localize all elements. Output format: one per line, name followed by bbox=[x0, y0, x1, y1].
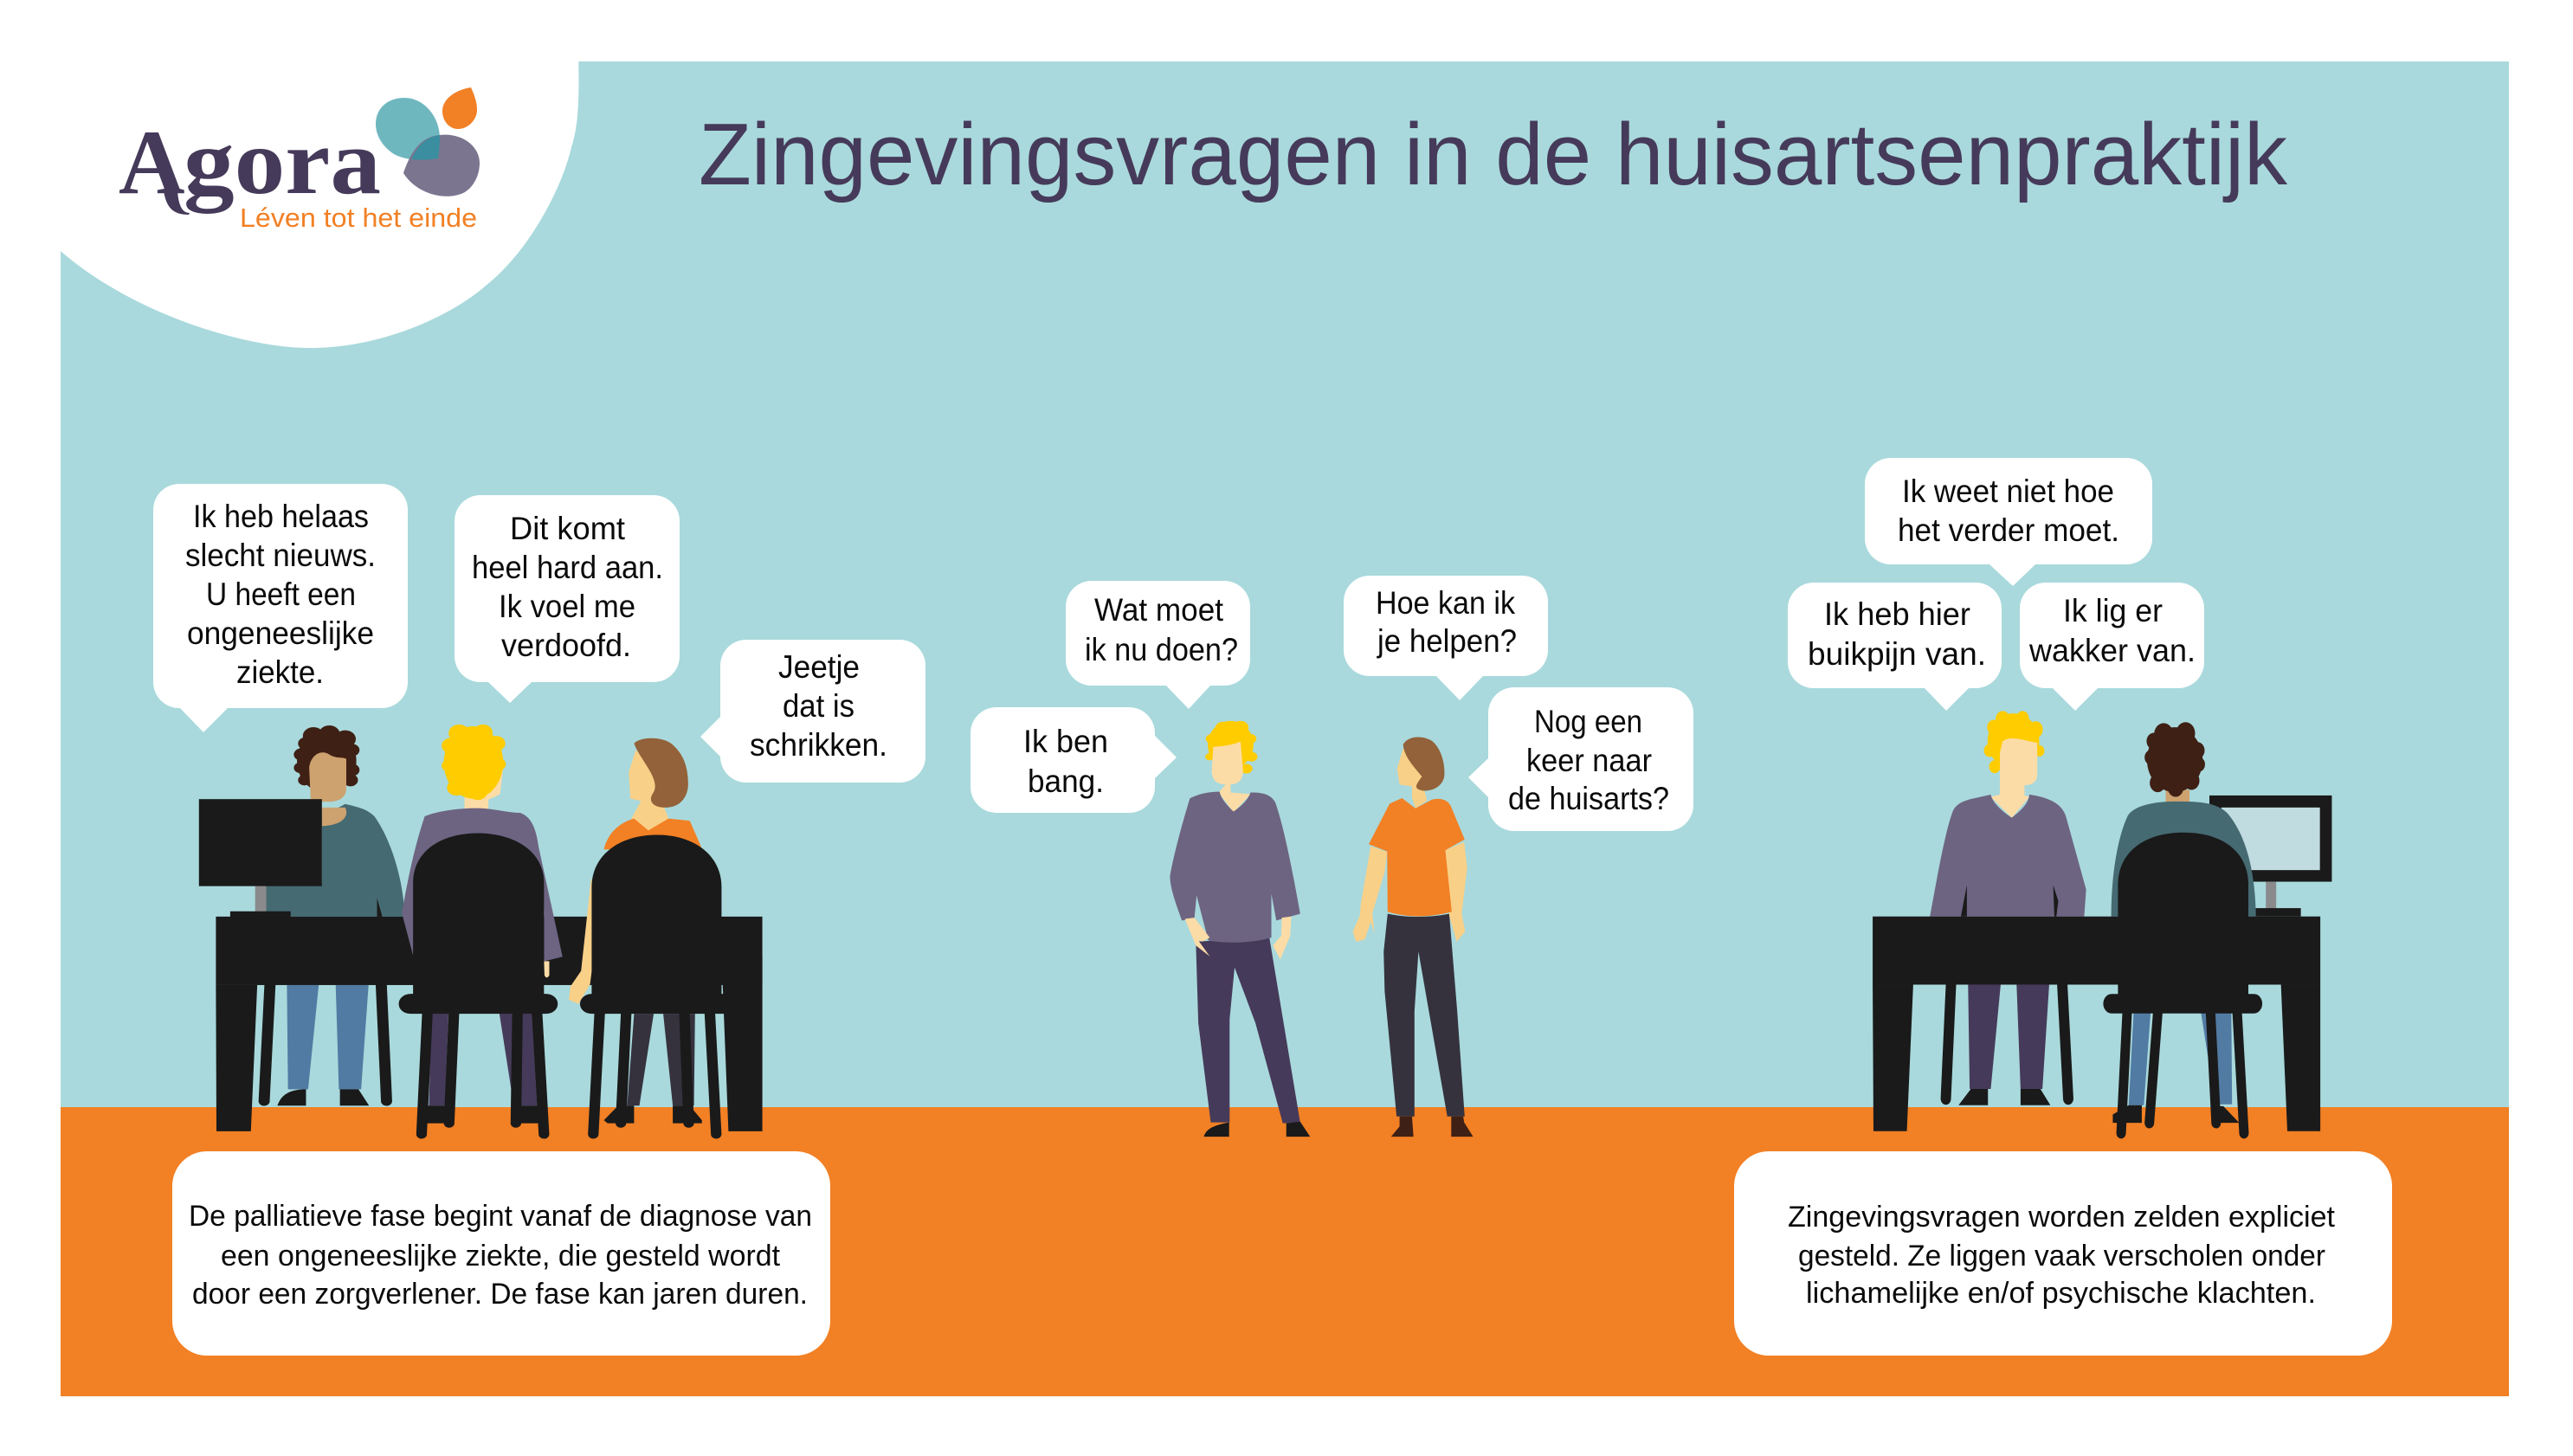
logo wordmark: A bbox=[119, 112, 185, 213]
patient man seated bbox=[402, 725, 563, 1105]
speech bubble: how can I help: Hoe kan ik bbox=[1376, 585, 1515, 621]
logo wordmark: gora bbox=[184, 111, 381, 214]
logo petal: purple bbox=[403, 135, 480, 196]
speech bubble: lying awake bbox=[2020, 583, 2204, 711]
speech bubble: patient numb: heel hard aan. bbox=[472, 550, 663, 585]
speech bubble: how can I help bbox=[1344, 576, 1548, 700]
chair bbox=[2103, 833, 2262, 1133]
speech bubble: patient numb: verdoofd. bbox=[501, 628, 631, 663]
title: Zingevingsvragen in de huisartsenpraktijk bbox=[699, 106, 2287, 203]
doctor seen from behind bbox=[2112, 722, 2256, 1123]
speech bubble: back to the GP: Nog een bbox=[1534, 704, 1642, 739]
desk bbox=[216, 917, 763, 1131]
speech bubble: partner shocked: dat is bbox=[783, 688, 854, 724]
speech bubble: partner shocked bbox=[700, 640, 925, 783]
callout: implicit questions: lichamelijke en/of psychische klachten. bbox=[1806, 1277, 2316, 1310]
woman standing bbox=[1353, 738, 1474, 1137]
callout: palliative phase bbox=[172, 1151, 830, 1356]
chairs bbox=[399, 833, 740, 1134]
speech bubble: doctor bad news: Ik heb helaas bbox=[193, 499, 369, 534]
speech bubble: doctor bad news: U heeft een bbox=[206, 577, 356, 612]
speech bubble: partner shocked: schrikken. bbox=[750, 727, 887, 763]
callout: palliative phase: een ongeneeslijke ziekte, die gesteld wordt bbox=[221, 1240, 781, 1272]
speech bubble: doctor bad news: slecht nieuws. bbox=[185, 538, 376, 573]
speech bubble: afraid: bang. bbox=[1028, 763, 1104, 799]
logo: Agora bbox=[119, 87, 480, 233]
patient man facing bbox=[1930, 711, 2086, 1105]
desk bbox=[1873, 917, 2320, 1131]
patient woman seated bbox=[569, 738, 702, 1124]
callout: implicit questions: Zingevingsvragen worden zelden expliciet bbox=[1788, 1201, 2336, 1234]
man standing bbox=[1170, 721, 1310, 1137]
speech bubble: patient numb bbox=[455, 495, 680, 703]
callout: palliative phase: door een zorgverlener. De fase kan jaren duren. bbox=[192, 1278, 808, 1311]
speech bubble: back to the GP bbox=[1468, 687, 1693, 831]
speech bubble: doctor bad news: ziekte. bbox=[236, 654, 324, 690]
callout: palliative phase: De palliatieve fase begint vanaf de diagnose van bbox=[189, 1200, 812, 1233]
logo petal overlap bbox=[411, 135, 440, 160]
computer monitor bbox=[199, 799, 322, 917]
speech bubble: stomach ache: buikpijn van. bbox=[1808, 636, 1986, 672]
speech bubble: afraid: Ik ben bbox=[1023, 724, 1108, 759]
speech bubble: back to the GP: de huisarts? bbox=[1508, 781, 1669, 816]
callout: implicit questions bbox=[1734, 1151, 2392, 1356]
speech bubble: what to do: ik nu doen? bbox=[1085, 632, 1238, 667]
scene: patient with hidden questions bbox=[1873, 711, 2331, 1133]
speech bubble: partner shocked: Jeetje bbox=[778, 649, 860, 685]
logo petal: orange bbox=[442, 87, 477, 129]
speech bubble: back to the GP: keer naar bbox=[1526, 743, 1652, 778]
doctor figure bbox=[266, 725, 404, 1105]
speech bubble: patient numb: Dit komt bbox=[510, 511, 626, 546]
speech bubble: doctor bad news: ongeneeslijke bbox=[187, 615, 374, 651]
callout: implicit questions: gesteld. Ze liggen vaak verscholen onder bbox=[1798, 1240, 2325, 1272]
speech bubble: how to continue: Ik weet niet hoe bbox=[1902, 474, 2114, 509]
speech bubble: lying awake: Ik lig er bbox=[2063, 593, 2163, 628]
computer monitor bbox=[2209, 796, 2331, 917]
speech bubble: how to continue: het verder moet. bbox=[1898, 512, 2119, 548]
speech bubble: how to continue bbox=[1865, 458, 2152, 586]
speech bubble: lying awake: wakker van. bbox=[2028, 633, 2196, 668]
logo tagline: Léven tot het einde bbox=[240, 203, 477, 233]
speech bubble: what to do: Wat moet bbox=[1094, 592, 1224, 628]
speech bubble: patient numb: Ik voel me bbox=[499, 589, 635, 624]
speech bubble: how can I help: je helpen? bbox=[1377, 623, 1517, 659]
logo petal: teal bbox=[376, 98, 440, 160]
scene: two people talking bbox=[1170, 721, 1474, 1137]
speech bubble: what to do bbox=[1066, 581, 1250, 709]
speech bubble: stomach ache bbox=[1788, 583, 2002, 711]
speech bubble: doctor bad news bbox=[153, 484, 408, 732]
speech bubble: stomach ache: Ik heb hier bbox=[1824, 596, 1970, 632]
scene: doctor delivers bad news bbox=[199, 725, 763, 1134]
speech bubble: afraid bbox=[971, 707, 1177, 813]
